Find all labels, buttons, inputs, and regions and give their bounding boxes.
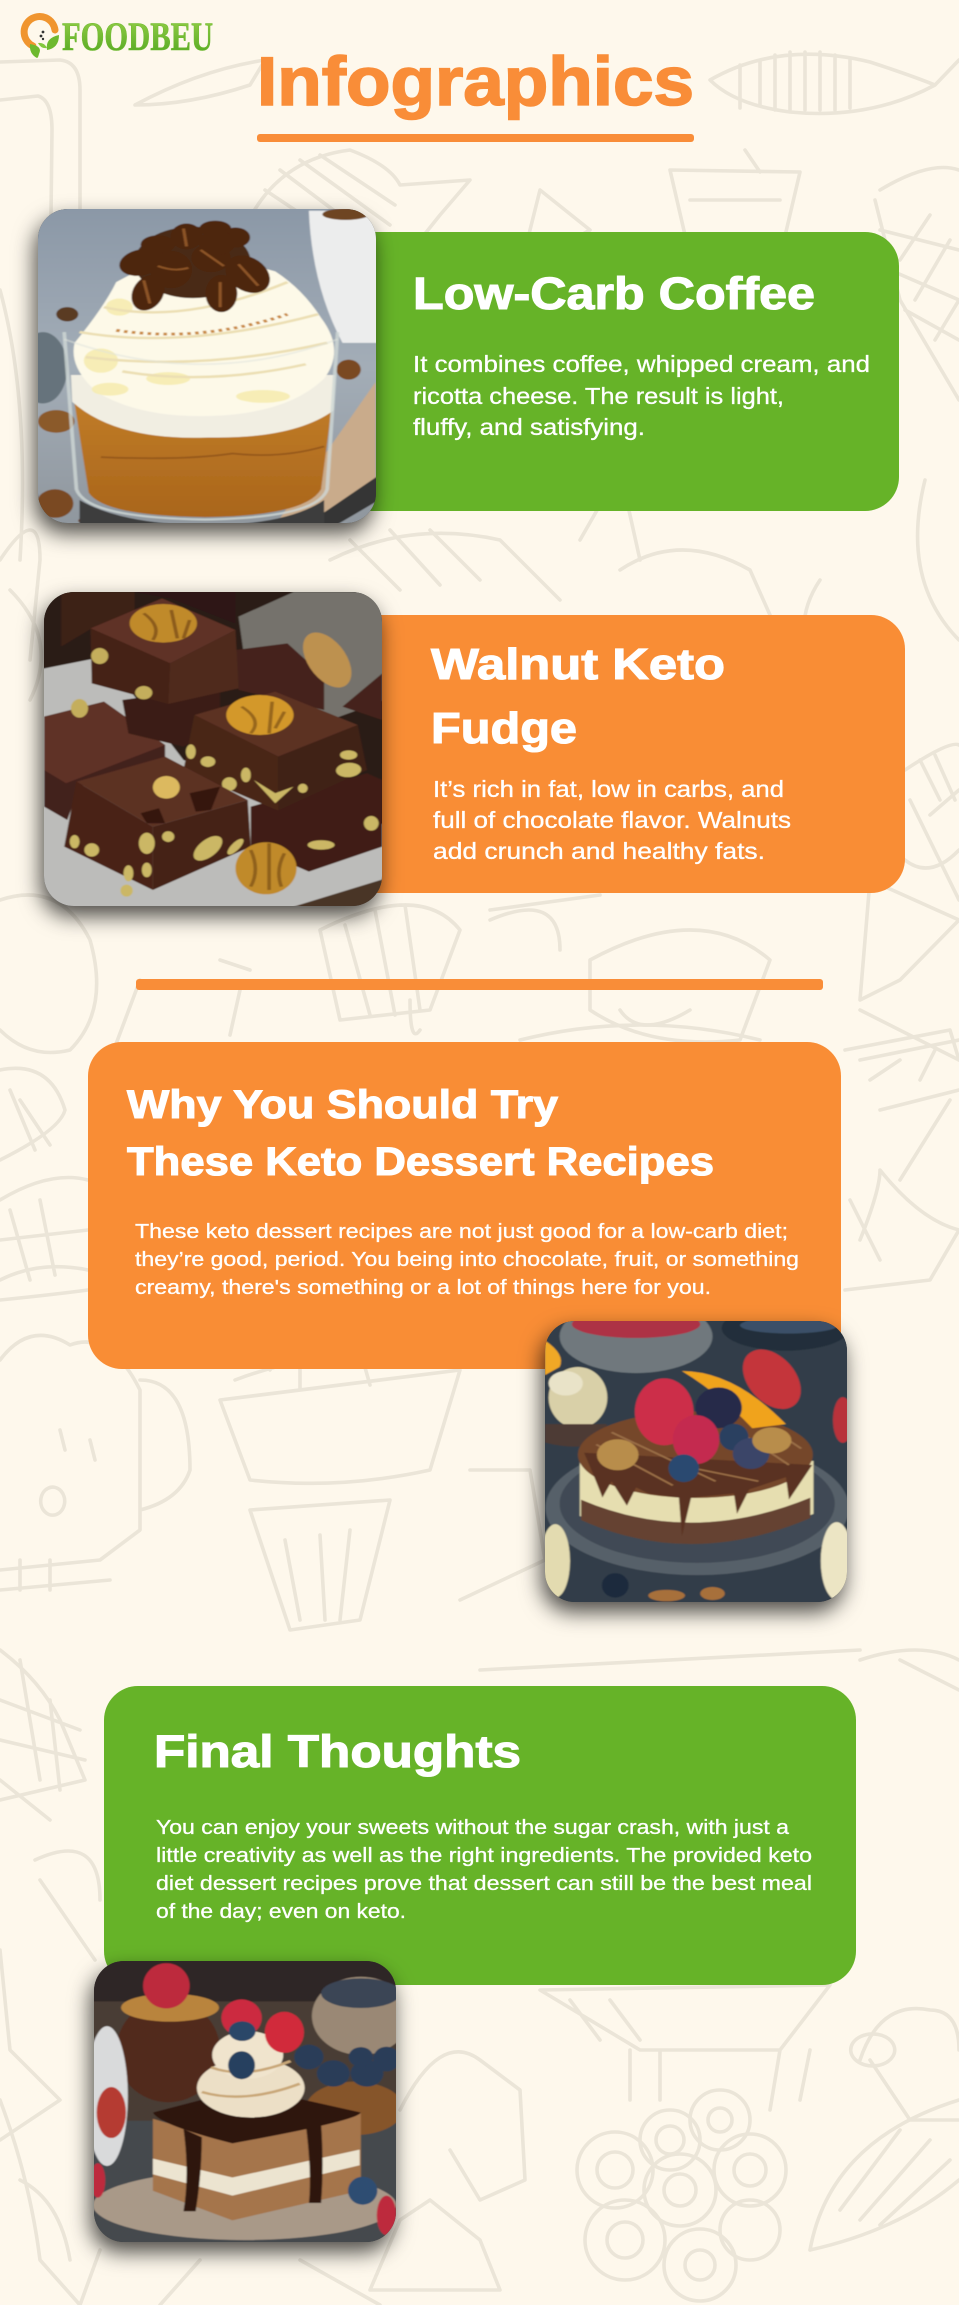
heading: These Keto Dessert Recipes bbox=[127, 1140, 714, 1184]
heading bbox=[431, 640, 725, 753]
heading: Fudge bbox=[431, 704, 577, 753]
body text: fluffy, and satisfying. bbox=[413, 414, 645, 440]
photo: walnut fudge bbox=[37, 590, 391, 910]
photo shadow bbox=[94, 1961, 396, 2242]
body text: of the day; even on keto. bbox=[156, 1900, 406, 1923]
body text: ricotta cheese. The result is light, bbox=[413, 383, 784, 409]
body text bbox=[135, 1220, 799, 1299]
body text: add crunch and healthy fats. bbox=[433, 838, 765, 864]
body text bbox=[413, 351, 870, 440]
panel: Final Thoughts bbox=[86, 1686, 856, 2248]
body text: creamy, there's something or a lot of things here for you. bbox=[135, 1276, 711, 1299]
orange card bbox=[88, 1042, 841, 1369]
panel: Low-Carb Coffee bbox=[18, 204, 899, 529]
body text: It’s rich in fat, low in carbs, and bbox=[433, 776, 784, 802]
panel: Walnut Keto Fudge bbox=[37, 590, 905, 910]
heading: Why You Should Try bbox=[127, 1083, 559, 1127]
title: Infographics bbox=[257, 43, 694, 120]
heading bbox=[127, 1083, 714, 1184]
green card bbox=[104, 1686, 856, 1985]
body text: they’re good, period. You being into chocolate, fruit, or something bbox=[135, 1248, 799, 1271]
heading: Walnut Keto bbox=[431, 640, 725, 689]
photo shadow bbox=[38, 209, 376, 523]
body text: little creativity as well as the right ingredients. The provided keto bbox=[156, 1844, 812, 1867]
body text bbox=[156, 1816, 812, 1923]
body text: These keto dessert recipes are not just good for a low-carb diet; bbox=[135, 1220, 788, 1243]
body text: diet dessert recipes prove that dessert can still be the best meal bbox=[156, 1872, 812, 1895]
green card bbox=[370, 232, 899, 511]
heading: Low-Carb Coffee bbox=[413, 268, 815, 319]
photo: coffee mousse bbox=[38, 209, 376, 523]
panel: Why You Should Try bbox=[88, 1042, 856, 1604]
photo: chocolate cheesecake with berries bbox=[545, 1321, 847, 1602]
orange card bbox=[375, 615, 905, 893]
logo: FOODBEU bbox=[24, 14, 213, 59]
heading: Final Thoughts bbox=[154, 1726, 521, 1777]
photo shadow bbox=[545, 1321, 847, 1602]
divider bbox=[136, 979, 823, 990]
photo shadow bbox=[44, 592, 382, 906]
body text: It combines coffee, whipped cream, and bbox=[413, 351, 870, 377]
title underline bbox=[257, 134, 694, 142]
body text bbox=[433, 776, 791, 864]
body text: full of chocolate flavor. Walnuts bbox=[433, 807, 791, 833]
logo: FOODBEU: FOODBEU bbox=[62, 14, 213, 59]
body text: You can enjoy your sweets without the sugar crash, with just a bbox=[156, 1816, 790, 1839]
photo: chocolate layer cake bbox=[94, 1961, 396, 2242]
